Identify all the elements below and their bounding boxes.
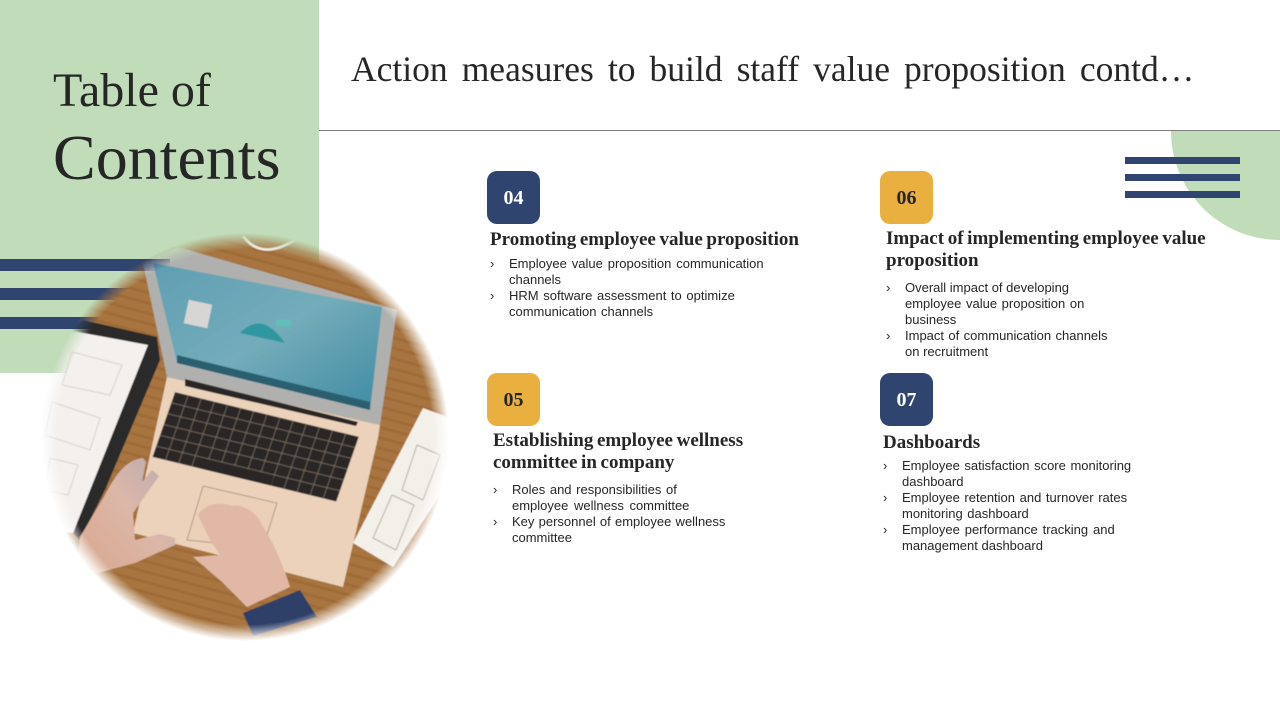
laptop base xyxy=(133,377,380,587)
title: Table of Contents: Contents xyxy=(53,122,281,193)
left dark folder xyxy=(67,320,160,540)
bullets 06: › xyxy=(886,328,890,343)
title: Table of Contents xyxy=(53,64,281,193)
keyboard xyxy=(152,392,359,502)
bullets 04: › xyxy=(490,288,494,303)
bullets 04: communication channels xyxy=(509,304,653,319)
bullets 04 xyxy=(490,256,764,319)
bullets 07: management dashboard xyxy=(902,538,1043,553)
decoration: top right green quarter circle xyxy=(1171,130,1280,240)
bullets 06: business xyxy=(905,312,956,327)
laptop screen xyxy=(153,263,382,410)
header divider line xyxy=(319,130,1280,131)
badge 05: 05 xyxy=(504,389,524,411)
heading 05: committee in company xyxy=(493,452,674,473)
section 05 xyxy=(487,373,743,545)
bullets 07: Employee performance tracking and xyxy=(902,522,1115,537)
icon: top right navy bars xyxy=(1125,157,1240,198)
bullets 05: › xyxy=(493,514,497,529)
bullets 07: Employee retention and turnover rates xyxy=(902,490,1127,505)
bullets 05: Roles and responsibilities of xyxy=(512,482,677,497)
heading 06 xyxy=(886,228,1206,271)
panel: green title background xyxy=(0,0,319,373)
bullets 07: monitoring dashboard xyxy=(902,506,1029,521)
bullets 07: › xyxy=(883,522,887,537)
heading: slide title: Action measures to build staff value proposition contd… xyxy=(351,49,1194,89)
right hand xyxy=(193,504,290,607)
badge 06: 06 xyxy=(896,187,916,209)
badge 04 xyxy=(487,171,540,224)
bullets 06: Overall impact of developing xyxy=(905,280,1069,295)
bullets 04: HRM software assessment to optimize xyxy=(509,288,735,303)
screen contents xyxy=(177,300,370,410)
bullets 07: Employee satisfaction score monitoring xyxy=(902,458,1131,473)
heading 06: Impact of implementing employee value xyxy=(886,228,1206,249)
title: Table of Contents: Table of xyxy=(53,64,211,117)
bullets 06: › xyxy=(886,280,890,295)
wooden desk xyxy=(66,234,447,640)
left notebook xyxy=(35,325,148,533)
left hand xyxy=(78,458,175,573)
icon: left navy bars xyxy=(0,259,170,329)
section 07 xyxy=(880,373,1131,553)
section 06 xyxy=(880,171,1206,359)
bullets 06 xyxy=(886,280,1108,359)
heading 06: proposition xyxy=(886,250,979,271)
white cable xyxy=(243,236,298,250)
bullets 07 xyxy=(883,458,1131,553)
bullets 06: Impact of communication channels xyxy=(905,328,1108,343)
bullets 07: › xyxy=(883,490,887,505)
badge 05 xyxy=(487,373,540,426)
badge 06 xyxy=(880,171,933,224)
bullets 04: Employee value proposition communication xyxy=(509,256,764,271)
badge 07 xyxy=(880,373,933,426)
bullets 05: › xyxy=(493,482,497,497)
heading 04: Promoting employee value proposition xyxy=(490,229,799,250)
photo: laptop on a wooden desk in a soft circle xyxy=(45,234,447,640)
heading 07: Dashboards xyxy=(883,432,980,453)
bullets 04: › xyxy=(490,256,494,271)
bullets 05: Key personnel of employee wellness xyxy=(512,514,725,529)
shirt cuff xyxy=(243,590,317,636)
bullets 05 xyxy=(493,482,725,545)
heading 05 xyxy=(493,430,743,473)
bullets 04: channels xyxy=(509,272,561,287)
bullets 05: committee xyxy=(512,530,572,545)
bullets 07: › xyxy=(883,458,887,473)
bullets 06: on recruitment xyxy=(905,344,988,359)
badge 04: 04 xyxy=(504,187,524,209)
trackpad xyxy=(187,486,277,548)
bullets 05: employee wellness committee xyxy=(512,498,689,513)
laptop lid xyxy=(143,247,397,425)
section 04 xyxy=(487,171,799,319)
bullets 06: employee value proposition on xyxy=(905,296,1084,311)
right paper xyxy=(353,408,450,567)
badge 07: 07 xyxy=(896,389,916,411)
heading 05: Establishing employee wellness xyxy=(493,430,743,451)
bullets 07: dashboard xyxy=(902,474,963,489)
